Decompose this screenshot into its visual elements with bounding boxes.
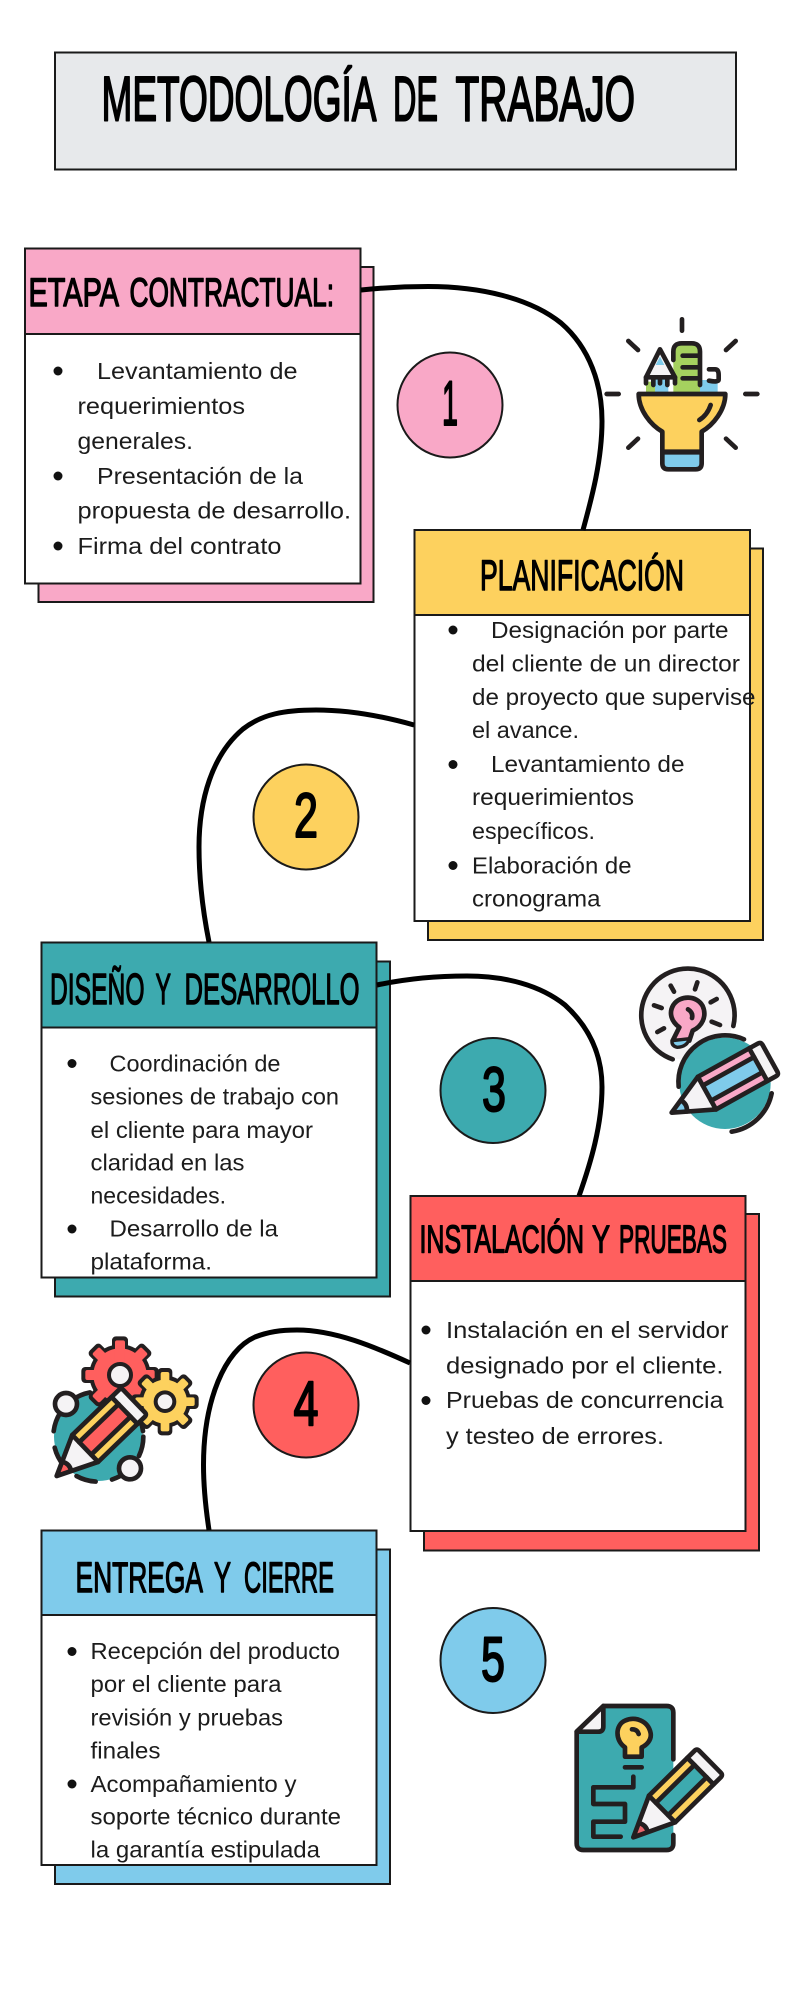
list: etapa contractual: Firma del contrato: [78, 533, 282, 559]
list: entrega y cierre: finales: [90, 1738, 160, 1764]
title panel: [55, 52, 736, 170]
heading: instalación y pruebas: Y: [592, 1218, 610, 1262]
panel: planificación: [414, 530, 763, 940]
heading: diseño y desarrollo: DESARROLLO: [184, 965, 360, 1014]
list: etapa contractual: Presentación de la: [97, 463, 303, 489]
list: etapa contractual: propuesta de desarrollo.: [78, 498, 351, 524]
heading: diseño y desarrollo: DISEÑO: [50, 964, 144, 1014]
list: planificación: de proyecto que supervise: [472, 684, 756, 710]
number badge 5: 5: [481, 1625, 505, 1695]
connector: step 2 to step 3: [199, 710, 414, 942]
heading: etapa contractual: ETAPA: [28, 271, 119, 315]
list: planificación: específicos.: [472, 818, 595, 844]
list: planificación: [448, 617, 756, 912]
panel: entrega y cierre: [42, 1530, 390, 1884]
heading: entrega y cierre: ENTREGA: [76, 1554, 203, 1602]
number badge 4: 4: [294, 1370, 318, 1440]
number badge 2: [254, 764, 358, 870]
icon: document with idea and pencil: [577, 1706, 723, 1851]
title: DE: [393, 64, 438, 134]
number badge 3: [440, 1038, 546, 1143]
list: diseño y desarrollo: Desarrollo de la: [110, 1216, 278, 1242]
list: diseño y desarrollo: Coordinación de: [110, 1050, 280, 1076]
list: diseño y desarrollo: claridad en las: [90, 1150, 244, 1176]
number badge 4: [254, 1352, 358, 1458]
list: diseño y desarrollo: [68, 1050, 339, 1274]
list: planificación: cronograma: [472, 886, 601, 912]
number badge 2: 2: [294, 781, 318, 851]
list: instalación y pruebas: designado por el cliente.: [446, 1352, 724, 1378]
list: planificación: requerimientos: [472, 784, 634, 810]
list: diseño y desarrollo: necesidades.: [90, 1182, 226, 1208]
list: planificación: del cliente de un director: [472, 650, 740, 676]
list: etapa contractual: requerimientos: [78, 393, 245, 419]
heading: diseño y desarrollo: Y: [156, 965, 171, 1014]
panel: instalación y pruebas: [410, 1196, 759, 1550]
list: diseño y desarrollo: sesiones de trabajo con: [90, 1084, 339, 1110]
heading: etapa contractual: CONTRACTUAL:: [130, 271, 334, 315]
list: entrega y cierre: la garantía estipulada: [90, 1836, 320, 1862]
heading: planificación: PLANIFICACIÓN: [480, 552, 684, 600]
list: etapa contractual: generales.: [78, 428, 193, 454]
list: entrega y cierre: revisión y pruebas: [90, 1704, 283, 1730]
heading: etapa contractual: [28, 271, 334, 315]
icon: lightbulb and pencil: [641, 967, 779, 1132]
heading: instalación y pruebas: PRUEBAS: [619, 1218, 727, 1262]
number badge 3: 3: [482, 1055, 506, 1125]
number badge 5: [440, 1608, 546, 1713]
list: instalación y pruebas: y testeo de errores.: [446, 1423, 664, 1449]
connector: step 1 to step 2: [361, 286, 602, 530]
title: METODOLOGÍA: [102, 64, 376, 134]
list: planificación: el avance.: [472, 717, 579, 743]
list: entrega y cierre: soporte técnico durante: [90, 1804, 341, 1830]
heading: entrega y cierre: Y: [214, 1554, 231, 1602]
connector: step 4 to step 5: [204, 1330, 410, 1530]
list: etapa contractual: Levantamiento de: [97, 358, 298, 384]
connector: step 3 to step 4: [377, 976, 602, 1196]
list: diseño y desarrollo: el cliente para mayor: [90, 1117, 313, 1143]
heading: instalación y pruebas: INSTALACIÓN: [420, 1218, 584, 1262]
heading: diseño y desarrollo: [50, 964, 360, 1014]
number badge 1: [398, 352, 502, 458]
list: planificación: Designación por parte: [491, 617, 728, 643]
list: instalación y pruebas: Pruebas de concurrencia: [446, 1387, 724, 1413]
heading: entrega y cierre: CIERRE: [244, 1554, 334, 1602]
list: entrega y cierre: por el cliente para: [90, 1671, 282, 1697]
list: etapa contractual: [54, 358, 351, 559]
list: entrega y cierre: Acompañamiento y: [90, 1771, 297, 1797]
list: entrega y cierre: [68, 1638, 341, 1862]
list: entrega y cierre: Recepción del producto: [90, 1638, 340, 1664]
icon: lightbulb with design tools: [607, 319, 757, 469]
icon: gears and pencil: [44, 1336, 199, 1489]
list: diseño y desarrollo: plataforma.: [90, 1248, 212, 1274]
list: instalación y pruebas: [422, 1317, 729, 1449]
list: planificación: Levantamiento de: [491, 751, 684, 777]
title: TRABAJO: [456, 64, 635, 134]
list: instalación y pruebas: Instalación en el servidor: [446, 1317, 729, 1343]
list: planificación: Elaboración de: [472, 852, 632, 878]
panel: etapa contractual: [25, 248, 374, 602]
panel: diseño y desarrollo: [42, 942, 390, 1296]
number badge 1: 1: [442, 369, 458, 439]
